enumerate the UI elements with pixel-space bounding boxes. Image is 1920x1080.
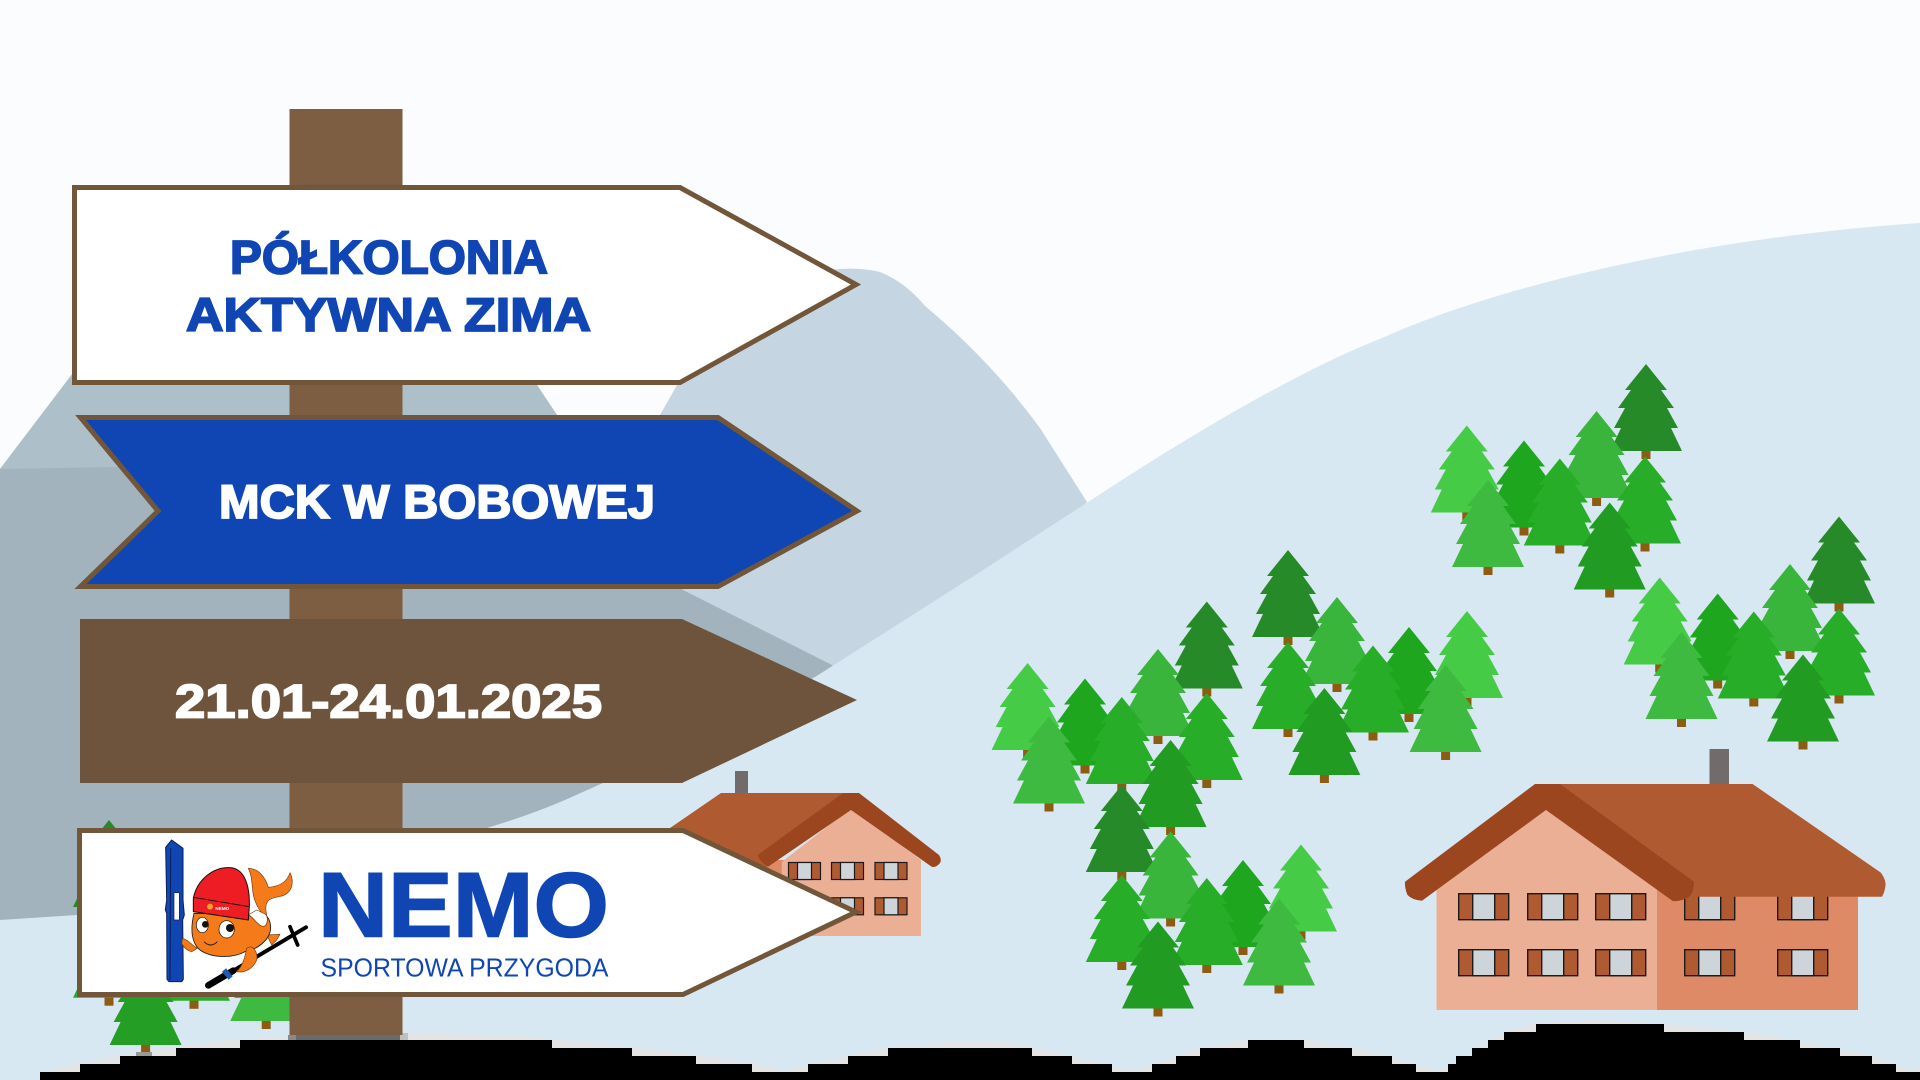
forest: right cluster <box>1624 516 1875 750</box>
mountain: grey left peak <box>0 220 860 1000</box>
icon: ski and fish mascot <box>165 840 306 985</box>
location text: MCK W BOBOWEJ <box>219 475 655 528</box>
forest: hidden cluster behind signs <box>73 820 324 1053</box>
signpost <box>290 109 402 1035</box>
title text: PÓŁKOLONIA <box>230 230 548 284</box>
ground silhouette <box>40 1024 1920 1080</box>
logo wordmark: NEMO <box>318 855 609 957</box>
snow hill <box>0 223 1920 1080</box>
ground fringe <box>40 1016 1920 1080</box>
house: large right <box>1405 749 1886 1010</box>
forest: middle cluster <box>1252 550 1503 783</box>
sign: dates <box>80 619 857 783</box>
house: small behind sign <box>670 771 941 936</box>
post base shadow <box>136 1033 408 1056</box>
snow edge over fringe <box>0 1000 1920 1080</box>
icon: ski and fish mascot: NEMO <box>215 906 230 911</box>
logo tagline: SPORTOWA PRZYGODA <box>320 954 608 982</box>
title text <box>186 230 591 342</box>
dates text: 21.01-24.01.2025 <box>175 674 602 728</box>
mountain: light back peak <box>620 269 1087 700</box>
sign: NEMO logo <box>80 830 856 994</box>
forest: left upper cluster <box>992 602 1243 835</box>
title text: AKTYWNA ZIMA <box>186 289 591 342</box>
sign: title <box>74 188 856 382</box>
sign: location <box>80 418 857 586</box>
forest: left lower cluster <box>1086 785 1337 1016</box>
forest: top right cluster <box>1431 364 1682 598</box>
